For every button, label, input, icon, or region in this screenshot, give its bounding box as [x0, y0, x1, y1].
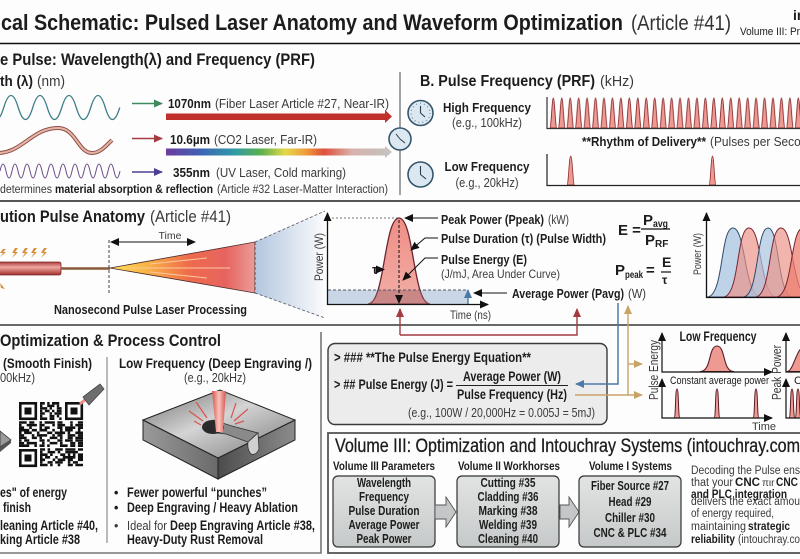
chart: pulse anatomy: Power (W) — [312, 233, 326, 281]
callout: pulse duration — [411, 231, 606, 250]
arrow: red — [132, 138, 162, 140]
text block: decoding the pulse: strategic — [748, 521, 791, 533]
equation: Pulse Frequency (Hz) — [457, 387, 567, 402]
caption: rhythm of delivery — [582, 134, 800, 149]
chart: pulse energy low frequency — [646, 329, 772, 400]
caption: material absorption: material absorption & reflection — [55, 184, 213, 196]
panel: pulse energy equation — [328, 344, 607, 424]
bullets: low frequency: Fewer powerful “punches” — [127, 485, 267, 500]
chart: peak power high frequency — [786, 375, 800, 418]
heading: section A: e Pulse: Wavelength(λ) and Frequency (PRF) — [0, 51, 315, 69]
bullets: high frequency: leaning Article #40, — [0, 518, 98, 533]
label: high frequency — [443, 100, 532, 130]
panel: pulse frequency — [408, 73, 800, 190]
text block: decoding the pulse: of energy required, — [691, 508, 774, 520]
axes — [328, 213, 488, 304]
label: 1070nm: (Fiber Laser Article #27, Near-IR) — [215, 96, 389, 111]
heading: section C: ution Pulse Anatomy — [0, 207, 145, 226]
column: volume III parameters: Pulse Duration — [348, 504, 420, 518]
callout: pulse duration: Pulse Duration (τ) (Pulse Width) — [441, 231, 606, 246]
equation — [334, 369, 568, 402]
label: 1070nm: 1070nm — [168, 96, 211, 111]
formula: energy: P — [645, 232, 655, 249]
chart: overlapping pulses: Power (W) — [692, 233, 704, 275]
column: volume I systems: Fiber Source #27 — [591, 479, 669, 493]
panel: optimization and process control — [0, 331, 321, 553]
heading: high frequency finish — [0, 356, 92, 385]
caption: material absorption: determines — [0, 184, 52, 196]
laser beam — [212, 391, 226, 432]
chart: pulse energy high frequency — [662, 375, 776, 433]
column: volume II workhorses: Welding #39 — [479, 518, 537, 532]
heading: low frequency: Low Frequency (Deep Engraving /) — [119, 356, 312, 371]
heading: section C: (Article #41) — [150, 208, 231, 226]
text block: decoding the pulse: maintaining — [691, 521, 746, 533]
bullets: low frequency: Heavy-Duty Rust Removal — [127, 532, 263, 547]
column: volume I systems: Head #29 — [608, 495, 652, 509]
callout: peak power: Peak Power (Ppeak) — [441, 212, 544, 227]
chart: pulse energy high frequency: Constant average power — [670, 375, 769, 387]
chart: pulse anatomy: Time (ns) — [450, 308, 491, 322]
bullets: high frequency — [0, 485, 98, 547]
average power band — [328, 290, 468, 304]
panel: the pulse, wavelength and frequency — [0, 51, 392, 196]
chart: high frequency pulse train — [547, 97, 800, 128]
formula: peak power — [615, 254, 671, 287]
heading: high frequency finish: (Smooth Finish) — [3, 356, 92, 371]
equation: Average Power (W) — [463, 369, 561, 384]
callout: pulse energy: Pulse Energy (E) — [441, 252, 527, 267]
label: high frequency: (e.g., 100kHz) — [452, 116, 522, 130]
column: volume III parameters: Wavelength — [357, 476, 411, 490]
connector: pulse to equation, red bracket — [400, 309, 577, 335]
subheading: wavelength: (nm) — [37, 73, 65, 90]
column: volume I systems — [579, 461, 681, 547]
column: volume II workhorses: Cladding #36 — [478, 490, 539, 504]
bullets: low frequency — [114, 485, 315, 547]
text block: decoding the pulse: πιr — [762, 478, 775, 489]
subheading: wavelength — [0, 73, 65, 90]
column: volume III parameters: Frequency — [359, 490, 409, 504]
callout: pulse energy — [403, 252, 560, 281]
wave: UV laser — [0, 164, 120, 178]
beam cone — [110, 242, 255, 293]
wave: CO2 laser — [0, 128, 112, 153]
formula: peak power: = — [646, 262, 655, 279]
bullets: low frequency: • — [114, 519, 118, 533]
label: low frequency: (e.g., 20kHz) — [456, 176, 518, 190]
connector: tan frequency line — [575, 306, 642, 395]
callout: average power: (W) — [628, 286, 646, 301]
column: volume III parameters: Volume III Parameters — [333, 461, 435, 473]
heading: section B: (kHz) — [600, 73, 634, 90]
icon: high frequency clock — [408, 100, 433, 126]
icon: metal plate at left — [0, 431, 11, 452]
label: 355nm — [173, 165, 346, 180]
formula: energy: RF — [655, 239, 668, 250]
label: 10.6um: (CO2 Laser, Far-IR) — [214, 132, 317, 147]
chart: pulse energy low frequency: Low Frequency — [680, 329, 757, 344]
formula: energy: P — [643, 212, 653, 229]
arrow: workhorses to systems — [560, 497, 579, 527]
subheading: wavelength: th (λ) — [0, 73, 33, 90]
chart: peak power low frequency: Peak Power — [769, 344, 784, 400]
chart: pulse anatomy — [312, 213, 491, 322]
column: volume II workhorses: Cleaning #40 — [478, 532, 538, 546]
label: 355nm: 355nm — [173, 165, 210, 180]
groove — [207, 420, 258, 442]
icon: QR code — [19, 403, 83, 466]
chart: peak power low frequency — [769, 333, 800, 400]
column: volume III parameters — [333, 461, 435, 547]
bullets: low frequency: • — [114, 486, 118, 500]
caption: rhythm of delivery: **Rhythm of Delivery** — [582, 134, 707, 149]
equation example: (e.g., 100W / 20,000Hz = 0.005J = 5mJ) — [408, 406, 595, 420]
formula: peak power: P — [615, 262, 625, 279]
arrow: green — [132, 102, 162, 104]
time span arrow: Time — [159, 230, 182, 242]
column: volume I systems: Volume I Systems — [589, 461, 672, 473]
label: high frequency: High Frequency — [443, 100, 532, 115]
column: volume III parameters: Peak Power — [356, 532, 412, 546]
title: (Article #41) — [631, 12, 731, 35]
laser fiber tube — [0, 262, 110, 275]
bullets: high frequency: es" of energy — [0, 485, 67, 500]
heading: high frequency finish: 00kHz) — [0, 371, 35, 385]
formula: energy: E = — [618, 222, 641, 239]
column: volume I systems: Chiller #30 — [605, 511, 655, 525]
beam bar: spectrum — [166, 146, 392, 158]
text block: decoding the pulse: reliability — [691, 534, 736, 546]
hole — [202, 420, 224, 434]
caption: nanosecond processing: Nanosecond Pulse Laser Processing — [54, 303, 247, 317]
panel: pulse anatomy — [0, 207, 800, 322]
heading: section B: B. Pulse Frequency (PRF) — [420, 73, 595, 90]
text block: decoding the pulse: that your — [691, 477, 733, 489]
arrow: parameters to workhorses — [435, 497, 456, 527]
label: 10.6um — [170, 132, 317, 147]
label: low frequency: Low Frequency — [444, 159, 530, 174]
heading: low frequency — [119, 356, 312, 385]
chart: overlapping pulses — [692, 213, 800, 298]
caption: material absorption — [0, 184, 388, 196]
chart: pulse energy high frequency: Time — [752, 421, 776, 433]
formula: peak power: τ — [662, 273, 668, 287]
column: volume II workhorses: Cutting #35 — [480, 476, 536, 490]
callout: peak power: (kW) — [548, 212, 569, 227]
text block: decoding the pulse — [691, 465, 800, 546]
column: volume I systems: CNC & PLC #34 — [594, 526, 667, 540]
icon: low frequency clock — [408, 162, 433, 187]
heading: low frequency: (e.g., 20kHz) — [184, 371, 246, 385]
chart: pulse energy low frequency: Pulse Energy — [646, 340, 661, 400]
wave: fiber laser — [0, 96, 120, 120]
formula: peak power: E — [662, 254, 671, 270]
bullets: low frequency: • — [114, 501, 118, 515]
chart: pulse anatomy: τ — [372, 262, 378, 277]
pulse shape — [368, 218, 430, 304]
column: volume II workhorses: Marking #38 — [478, 504, 538, 518]
panel: volume III systems — [328, 433, 800, 553]
label: low frequency — [444, 159, 530, 190]
title: cal Schematic: Pulsed Laser Anatomy and Waveform Optimization — [1, 10, 623, 35]
column: volume II workhorses — [457, 461, 560, 547]
formula: energy: avg — [653, 219, 668, 230]
bullets: low frequency: Deep Engraving Article #38, — [170, 518, 315, 533]
equation: > ## Pulse Energy (J) = — [334, 376, 453, 392]
arrow: purple — [132, 171, 162, 173]
callout: pulse energy: (J/mJ, Area Under Curve) — [441, 267, 560, 281]
magnified spot projection — [255, 211, 325, 318]
chart: low frequency pulse train — [547, 154, 800, 186]
illustration: engraved metal block — [143, 390, 295, 479]
icon: center clock — [389, 128, 411, 150]
bullets: low frequency: Deep Engraving / Heavy Ablation — [127, 500, 298, 515]
formula: peak power: peak — [625, 270, 643, 281]
connector: blue average power line — [576, 303, 618, 384]
icon: laser marking head — [80, 384, 104, 405]
label: 355nm: (UV Laser, Cold marking) — [216, 165, 346, 180]
caption: material absorption: (Article #32 Laser-Matter Interaction) — [217, 184, 388, 196]
time span arrow — [111, 230, 195, 242]
bullets: high frequency: king Article #38 — [0, 532, 80, 547]
label: 10.6um: 10.6µm — [170, 132, 210, 147]
heading: section E: Optimization & Process Control — [0, 331, 221, 350]
formula: energy — [618, 212, 670, 250]
icon: lightning sparks — [0, 248, 47, 289]
sparks — [189, 402, 248, 425]
brand and volume tag — [740, 7, 800, 38]
bullets: high frequency: finish — [3, 500, 31, 515]
text block: decoding the pulse: CNC — [735, 477, 760, 489]
column: volume II workhorses: Volume II Workhorses — [458, 461, 560, 473]
callout: average power: Average Power (Pavg) — [512, 286, 624, 301]
column: volume III parameters: Average Power — [348, 518, 420, 532]
bullets: low frequency: Ideal for — [127, 518, 168, 533]
beam bar: red — [166, 110, 392, 123]
equation heading: > ### **The Pulse Energy Equation** — [334, 349, 531, 365]
